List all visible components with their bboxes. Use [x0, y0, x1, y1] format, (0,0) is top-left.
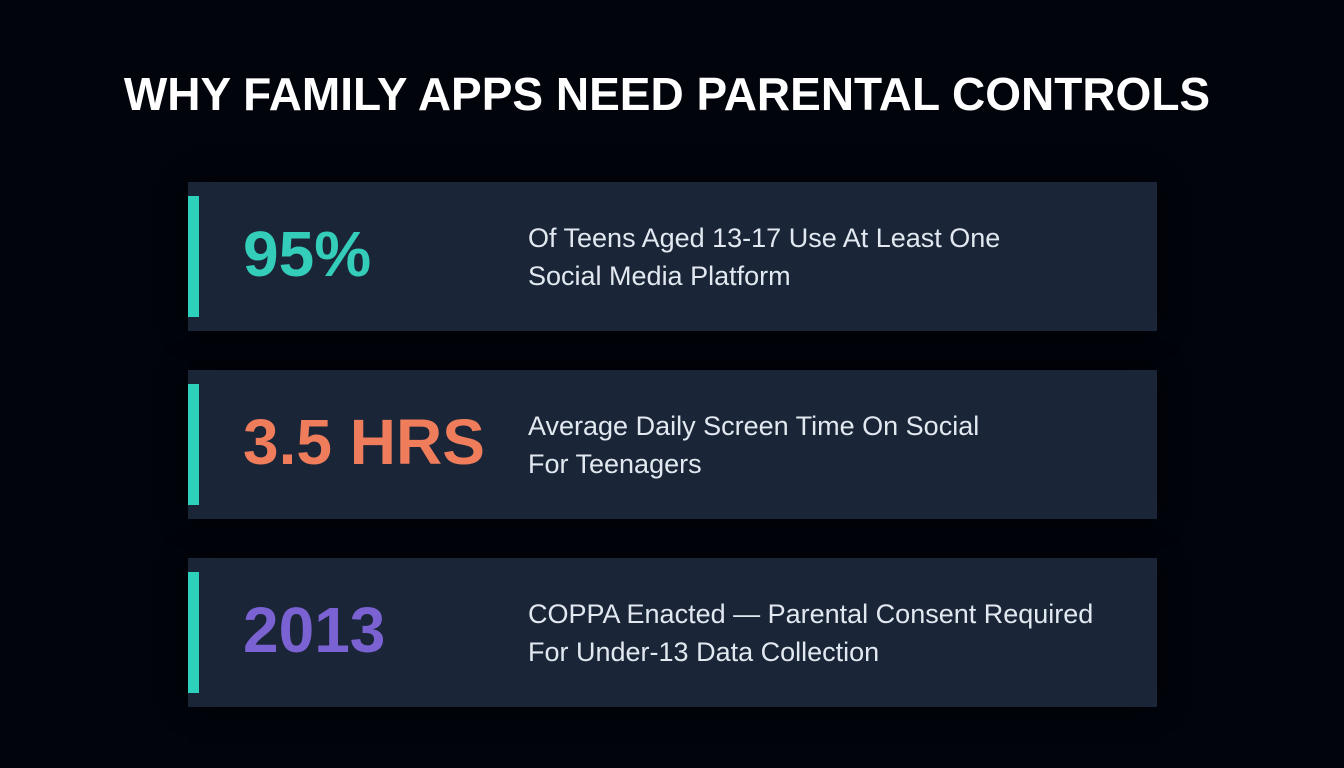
accent bar	[188, 196, 199, 317]
stat description: Social Media Platform	[528, 261, 791, 291]
panel: 95% stat card	[188, 182, 1157, 331]
stat value: 2013: 2013	[243, 594, 385, 666]
panel: 3.5 hrs stat card	[188, 370, 1157, 519]
stat value: 95%: 95%	[243, 218, 371, 290]
stat description	[528, 411, 979, 479]
stat description	[528, 599, 1093, 667]
stat description: COPPA Enacted — Parental Consent Required	[528, 599, 1093, 629]
stat description: Of Teens Aged 13-17 Use At Least One	[528, 223, 1000, 253]
stat description	[528, 223, 1000, 291]
accent bar	[188, 572, 199, 693]
title: WHY FAMILY APPS NEED PARENTAL CONTROLS	[124, 68, 1210, 120]
stat value: 3.5 HRS: 3.5 HRS	[243, 406, 485, 478]
stat description: Average Daily Screen Time On Social	[528, 411, 979, 441]
accent bar	[188, 384, 199, 505]
panel: 2013 stat card	[188, 558, 1157, 707]
stat description: For Teenagers	[528, 449, 702, 479]
stat description: For Under-13 Data Collection	[528, 637, 879, 667]
